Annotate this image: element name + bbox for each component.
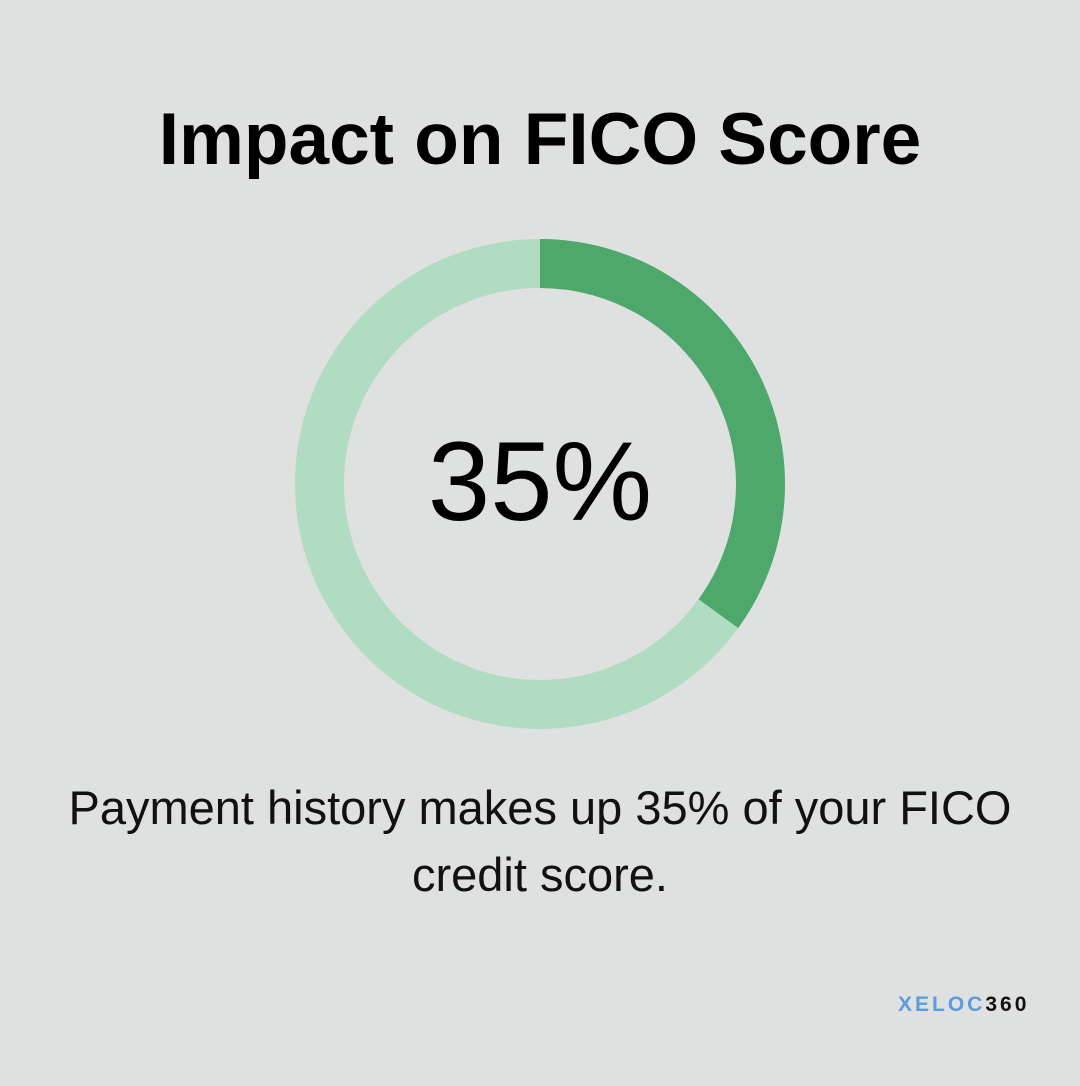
title: Impact on FICO Score xyxy=(159,99,921,180)
description text: credit score. xyxy=(412,848,668,901)
description text: Payment history makes up 35% of your FICO xyxy=(68,781,1011,834)
description text xyxy=(68,781,1011,901)
center value: 35% xyxy=(428,419,652,544)
logo: XELOC360 xyxy=(898,993,1029,1016)
